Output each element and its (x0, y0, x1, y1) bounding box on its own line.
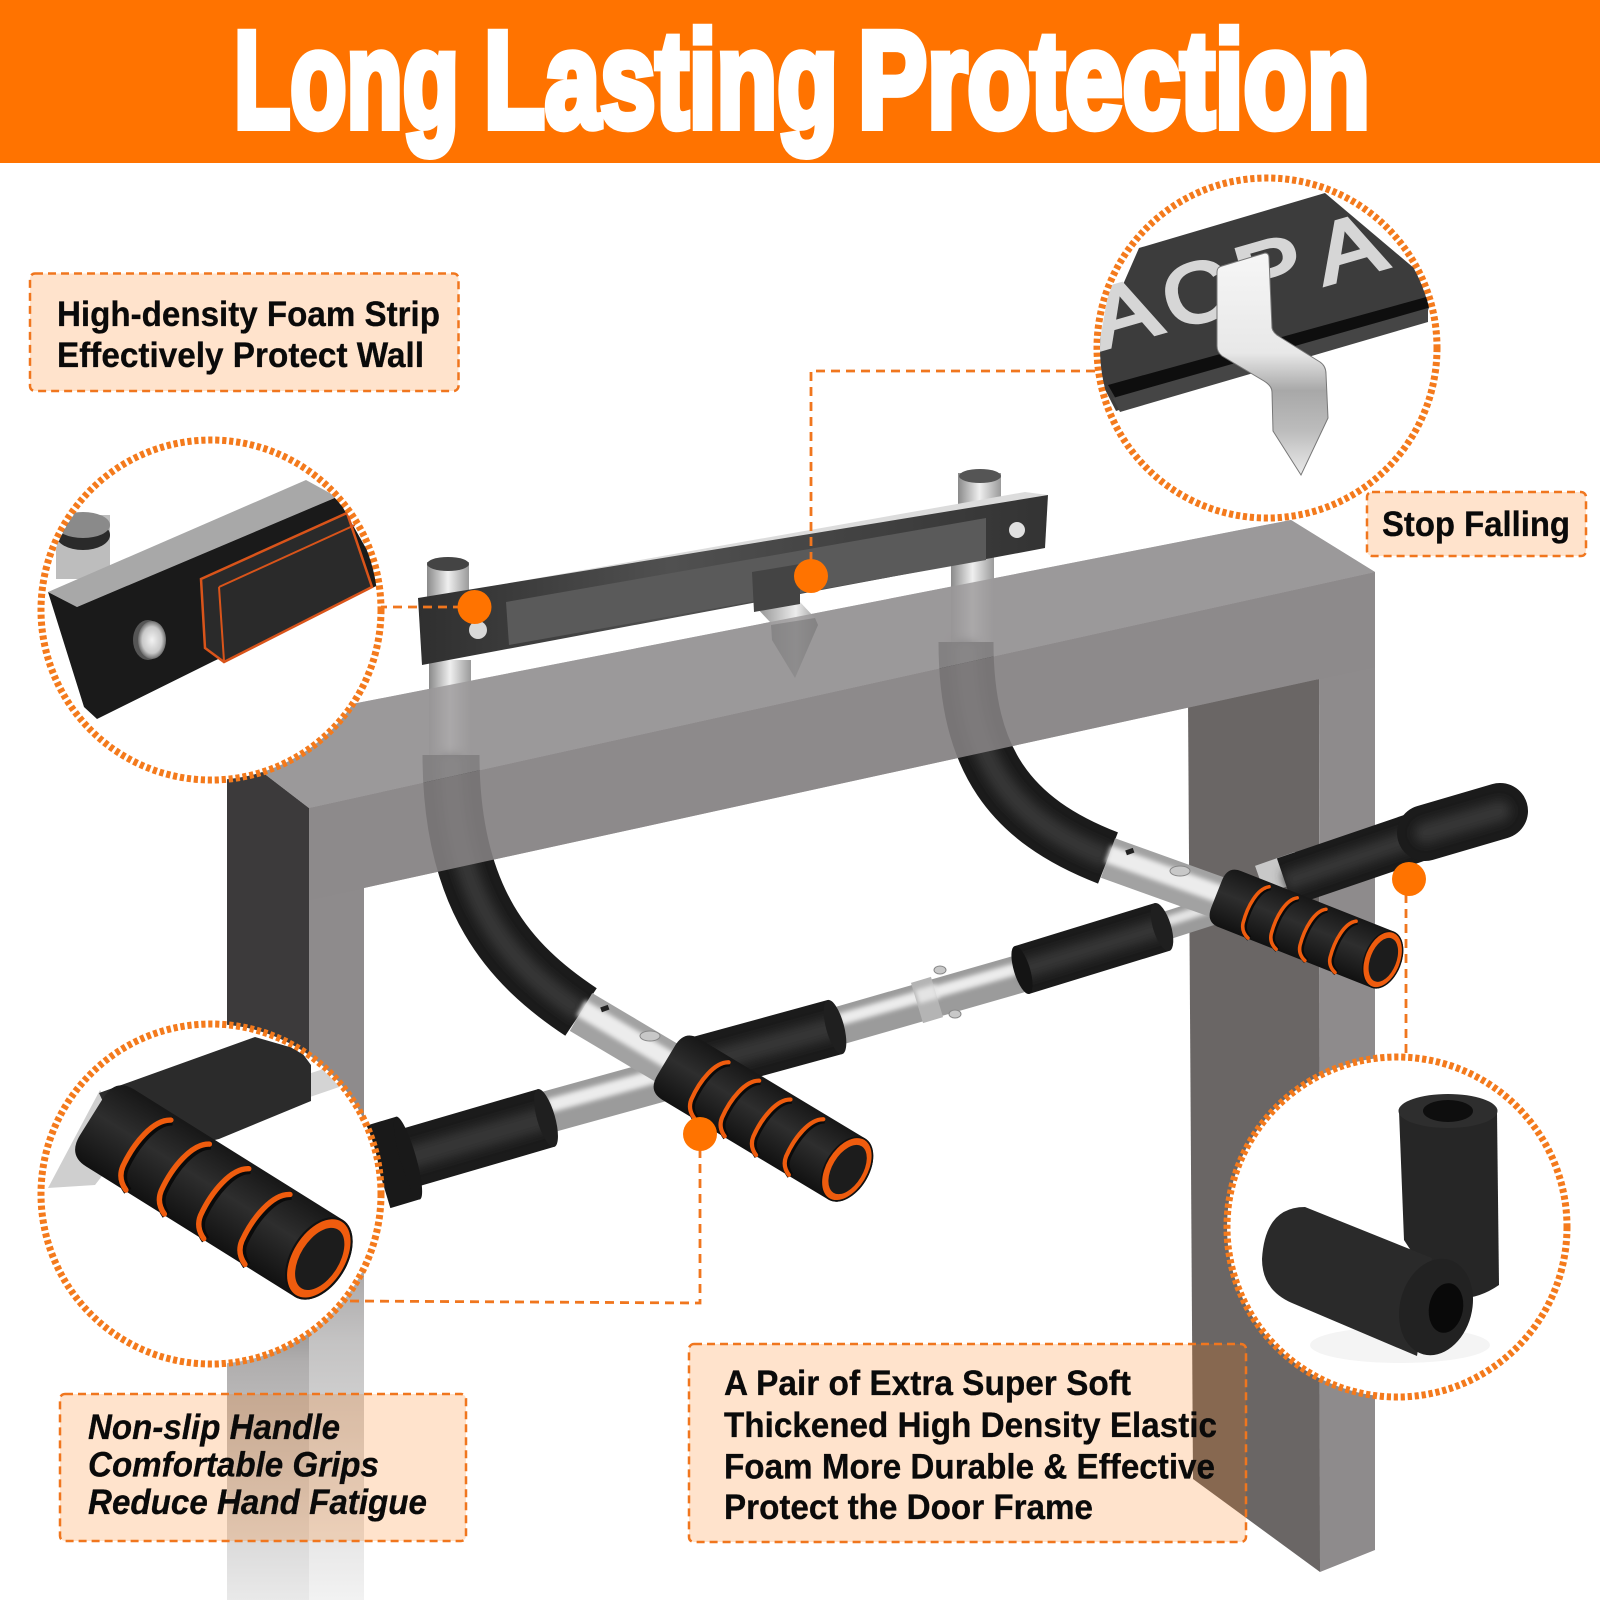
title: Long (234, 4, 459, 157)
title: Protection (858, 4, 1370, 157)
label: non-slip handle (60, 1394, 466, 1541)
upright sleeve (1398, 1094, 1499, 1298)
title (234, 4, 1370, 157)
label: non-slip handle: Reduce Hand Fatigue (88, 1483, 427, 1522)
left curved foam (451, 755, 581, 1012)
label: stop falling (1367, 492, 1586, 556)
door-top bracket: bar (418, 492, 1048, 665)
label: non-slip handle: Comfortable Grips (88, 1446, 379, 1484)
detail circle: door hook (1079, 178, 1440, 518)
label: foam sleeves (689, 1344, 1246, 1542)
right curved foam (966, 642, 1108, 858)
lying sleeve (1262, 1207, 1483, 1364)
label: foam sleeves: A Pair of Extra Super Soft (724, 1364, 1131, 1403)
label: stop falling: Stop Falling (1382, 505, 1570, 544)
detail circle: non-slip handle (41, 1024, 381, 1364)
header banner (0, 0, 1600, 163)
detail circle: door hook: A (1304, 193, 1395, 302)
detail circle: door hook: P (1224, 215, 1315, 324)
silver cross tubes (581, 854, 1300, 1066)
label: foam sleeves: Thickened High Density Elastic (724, 1406, 1217, 1445)
bolts and holes (600, 848, 1190, 1041)
label: foam sleeves: Foam More Durable & Effective (724, 1448, 1215, 1486)
right orange grip (1206, 866, 1411, 995)
door frame (227, 520, 1375, 1600)
hook (1217, 253, 1328, 475)
hotspot dots (458, 559, 1426, 1151)
connector lines (350, 371, 1406, 1303)
label: non-slip handle: Non-slip Handle (88, 1408, 340, 1447)
title: Lasting (484, 4, 838, 157)
label: foam sleeves: Protect the Door Frame (724, 1488, 1093, 1527)
frame overlay over bar (227, 520, 1375, 900)
hook behind bracket (755, 602, 818, 678)
detail circle: door hook: C (1151, 238, 1242, 347)
pull-up bar (227, 469, 1500, 1211)
label: foam strip: Effectively Protect Wall (57, 336, 424, 375)
label: foam strip (30, 274, 458, 391)
detail circle: foam sleeves (1227, 1057, 1567, 1397)
door-top bracket: pins (427, 469, 1001, 756)
detail circle: foam strip (41, 440, 385, 780)
silver main tube (548, 906, 1215, 1112)
left orange grip (648, 1030, 884, 1211)
main bar foam sleeves (378, 811, 1500, 1202)
logo letters: A (1079, 258, 1170, 367)
label: foam strip: High-density Foam Strip (57, 295, 440, 334)
